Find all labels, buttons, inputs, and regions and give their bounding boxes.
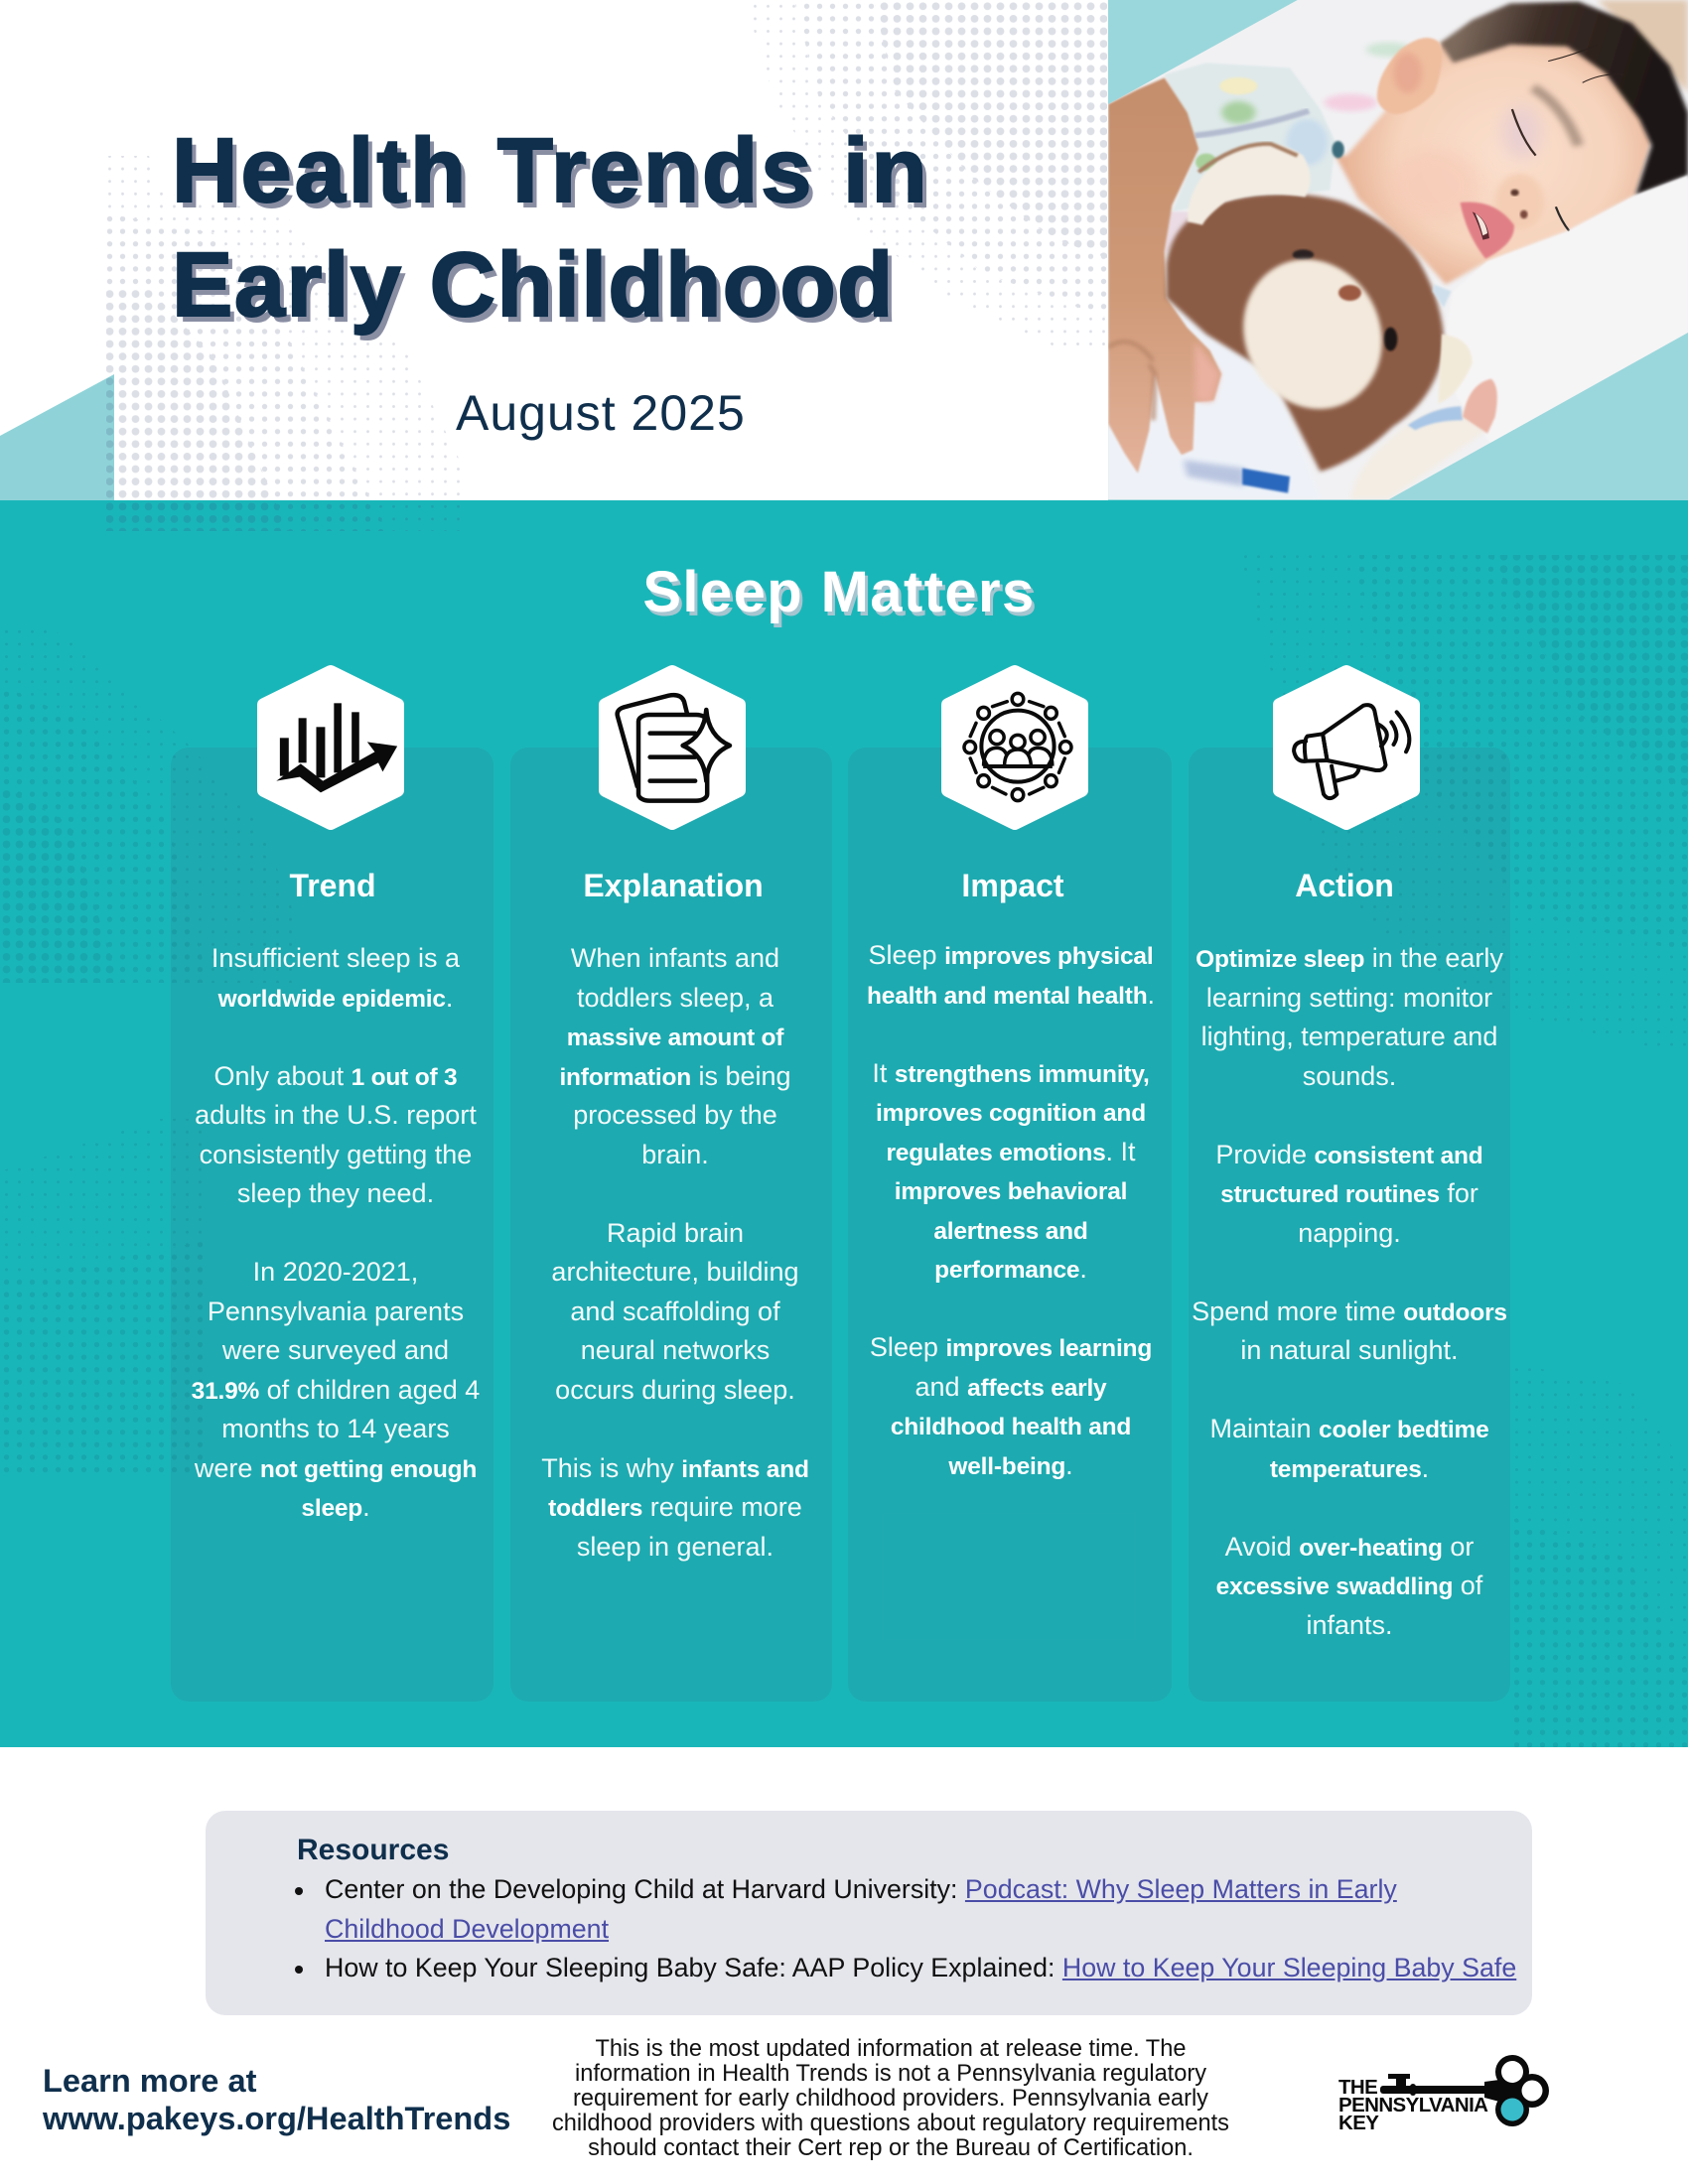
text block	[192, 943, 480, 1522]
text block: infants.	[1306, 1610, 1393, 1640]
text block: When infants and	[571, 943, 779, 973]
text block: Avoid over-heating or	[1225, 1531, 1474, 1561]
text block: months to 14 years	[221, 1414, 450, 1443]
light teal photo backing	[1108, 0, 1688, 500]
text block: well-being.	[948, 1449, 1073, 1479]
text block: Insufficient sleep is a	[211, 943, 460, 973]
text block: sounds.	[1303, 1060, 1396, 1090]
text block: temperatures.	[1270, 1453, 1429, 1483]
text block: sleep.	[301, 1492, 370, 1522]
heading: Impact	[961, 868, 1064, 903]
text block: improves behavioral	[895, 1178, 1127, 1205]
learn more link: Learn more at	[43, 2062, 256, 2099]
icon: group in circle	[941, 665, 1088, 830]
learn more link: www.pakeys.org/HealthTrends	[43, 2100, 510, 2136]
panel: action	[1189, 665, 1510, 1702]
text block: improves cognition and	[876, 1100, 1146, 1127]
text block: In 2020-2021,	[253, 1257, 418, 1287]
logo: The Pennsylvania Key: PENNSYLVANIA	[1338, 2094, 1488, 2116]
text block: and affects early	[915, 1372, 1106, 1402]
resources list: Childhood Development	[325, 1914, 609, 1944]
background shapes and photo	[0, 0, 1688, 1747]
resources heading: Resources	[297, 1834, 449, 1866]
logo: The Pennsylvania Key: KEY	[1338, 2112, 1379, 2134]
disclaimer: should contact their Cert rep or the Bureau of Certification.	[588, 2135, 1194, 2161]
text block: alertness and	[933, 1217, 1088, 1245]
text block	[1192, 943, 1507, 1640]
title: Health Trends in	[172, 120, 930, 221]
text block: Provide consistent and	[1215, 1140, 1483, 1169]
text block: were not getting enough	[195, 1453, 477, 1483]
text block: health and mental health.	[867, 979, 1155, 1009]
panel: impact	[848, 665, 1420, 1702]
text block: brain.	[641, 1140, 709, 1169]
text block: were surveyed and	[222, 1335, 449, 1365]
panel: resources	[206, 1811, 1532, 2015]
logo: The Pennsylvania Key: THE	[1338, 2076, 1377, 2099]
disclaimer: childhood providers with questions about regulatory requirements	[552, 2111, 1229, 2136]
text block: toddlers sleep, a	[577, 983, 774, 1013]
text block: Maintain cooler bedtime	[1209, 1414, 1489, 1443]
text block: This is why infants and	[541, 1453, 809, 1483]
text block: architecture, building	[551, 1257, 799, 1287]
disclaimer: information in Health Trends is not a Pennsylvania regulatory	[575, 2061, 1206, 2087]
photo: sleeping toddler with teddy bear	[1092, 0, 1688, 516]
text block: Sleep improves physical	[869, 940, 1153, 970]
text block: processed by the	[573, 1100, 777, 1130]
resources list: Center on the Developing Child at Harvard University: Podcast: Why Sleep Matters in Early	[325, 1874, 1397, 1904]
halftone dots: top right of header	[745, 0, 1107, 349]
halftone dots: teal right upper	[1240, 555, 1688, 1055]
text block: Pennsylvania parents	[208, 1297, 464, 1326]
text block: toddlers require more	[548, 1492, 802, 1522]
learn more link	[42, 2062, 510, 2136]
icon: bar chart with arrow	[257, 665, 404, 830]
text block: learning setting: monitor	[1206, 983, 1492, 1013]
text block	[541, 943, 809, 1561]
text block: structured routines for	[1220, 1178, 1478, 1208]
date: August 2025	[456, 385, 746, 441]
text block: information is being	[559, 1060, 791, 1090]
text block: excessive swaddling of	[1216, 1570, 1482, 1600]
panel: trend	[171, 665, 1420, 1702]
text block: neural networks	[581, 1335, 770, 1365]
text block: It strengthens immunity,	[872, 1058, 1150, 1088]
icon: documents with sparkle	[599, 665, 746, 830]
text block: Sleep improves learning	[870, 1332, 1152, 1362]
disclaimer	[552, 2036, 1229, 2161]
heading: Explanation	[583, 868, 764, 903]
text block: adults in the U.S. report	[195, 1100, 477, 1130]
halftone dots: teal left upper	[0, 620, 298, 983]
panel: explanation	[510, 665, 1420, 1702]
section heading: Sleep Matters	[642, 560, 1036, 624]
heading: Trend	[289, 868, 376, 903]
text block: sleep in general.	[577, 1531, 774, 1561]
text block: childhood health and	[891, 1414, 1131, 1440]
text block: performance.	[934, 1254, 1087, 1284]
title: Early Childhood	[172, 234, 895, 336]
text block: lighting, temperature and	[1201, 1022, 1497, 1051]
text block: regulates emotions. It	[886, 1136, 1136, 1165]
text block: and scaffolding of	[570, 1297, 780, 1326]
text block: consistently getting the	[200, 1140, 472, 1169]
text block: Optimize sleep in the early	[1196, 943, 1503, 973]
teal band	[0, 500, 1688, 1747]
light teal corner triangle	[0, 374, 114, 500]
text block: worldwide epidemic.	[218, 983, 453, 1013]
text block: sleep they need.	[237, 1178, 434, 1208]
title	[172, 120, 930, 341]
text block: Rapid brain	[607, 1217, 744, 1247]
logo: The Pennsylvania Key	[1338, 2055, 1549, 2134]
halftone dots: teal left lower	[0, 1119, 206, 1477]
resources list: How to Keep Your Sleeping Baby Safe: AAP Policy Explained: How to Keep Your Sleeping Baby Safe	[325, 1953, 1516, 1982]
text block: occurs during sleep.	[555, 1374, 795, 1404]
text block: Only about 1 out of 3	[214, 1060, 457, 1090]
halftone dots: left of header	[106, 156, 468, 531]
text block	[867, 940, 1155, 1479]
heading: Action	[1295, 868, 1394, 903]
text block: 31.9% of children aged 4	[192, 1374, 480, 1404]
text block: Spend more time outdoors	[1192, 1297, 1507, 1326]
icon: megaphone	[1273, 665, 1420, 830]
halftone dots: teal right lower	[1514, 1364, 1688, 1747]
disclaimer: requirement for early childhood providers. Pennsylvania early	[573, 2086, 1208, 2112]
resources list	[295, 1874, 1517, 1982]
text block: in natural sunlight.	[1240, 1335, 1459, 1365]
disclaimer: This is the most updated information at release time. The	[596, 2036, 1186, 2062]
text block: napping.	[1298, 1217, 1401, 1247]
text block: massive amount of	[567, 1024, 783, 1051]
